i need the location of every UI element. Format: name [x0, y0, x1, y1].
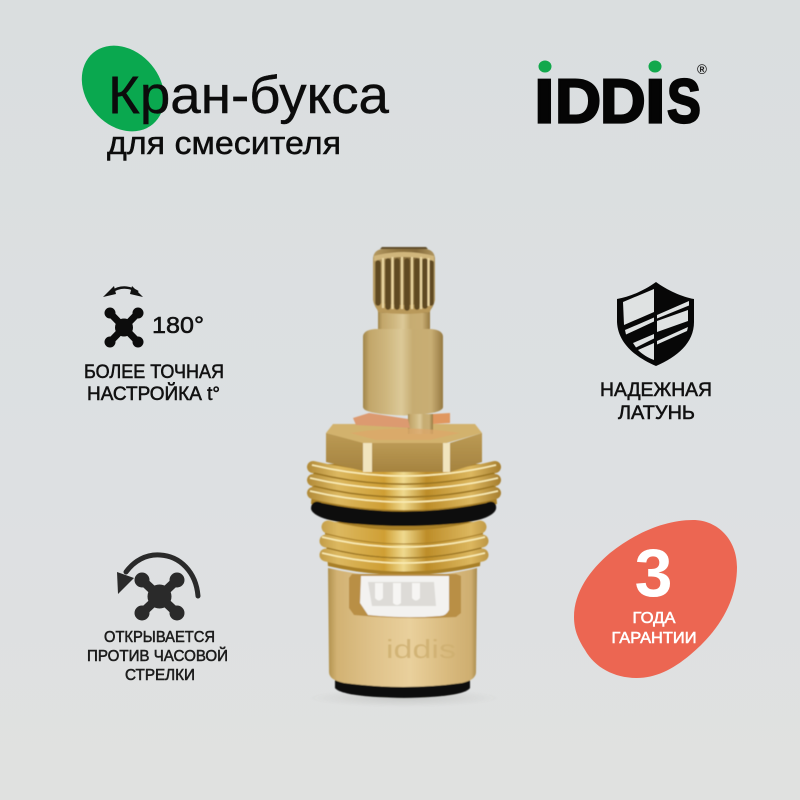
- title: [107, 66, 390, 161]
- upper cylinder: [363, 329, 443, 416]
- feature: reliable brass: [600, 282, 712, 424]
- copper washer: [350, 413, 460, 440]
- text: opens counter-clockwise: ОТКРЫВАЕТСЯ: [104, 629, 215, 646]
- threaded flange: [310, 464, 498, 513]
- badge: 3 year warranty: ГОДА: [632, 610, 676, 627]
- text: reliable brass: [600, 380, 712, 424]
- icon: shield: [617, 282, 694, 366]
- text: more precise temperature setting: БОЛЕЕ ТОЧНАЯ: [84, 362, 224, 383]
- text: more precise temperature setting: НАСТРОЙКА t°: [87, 383, 220, 405]
- label: 180 degrees: 180°: [152, 312, 204, 338]
- product: brass faucet cartridge: [309, 247, 499, 707]
- icon: handle with 180 degree arc: [103, 286, 144, 348]
- text: opens counter-clockwise: ПРОТИВ ЧАСОВОЙ: [87, 646, 228, 665]
- title: для смесителя: [107, 125, 341, 161]
- logo: IDDIS: D: [600, 67, 646, 136]
- text: opens counter-clockwise: [87, 629, 228, 684]
- title: Кран-букса: [108, 66, 390, 125]
- black bottom seal: [335, 678, 470, 698]
- spline head: [373, 247, 435, 334]
- lower thread: [322, 522, 485, 575]
- feature: 180 degree adjustment: [84, 286, 224, 405]
- logo: IDDIS: I: [645, 66, 666, 136]
- logo: IDDIS: S: [667, 68, 701, 137]
- text: reliable brass: ЛАТУНЬ: [618, 403, 695, 424]
- logo: IDDIS: [534, 60, 707, 137]
- feature: opens counter-clockwise: [87, 555, 228, 684]
- window with white insert: [349, 574, 461, 618]
- brass body: [328, 568, 477, 687]
- logo: IDDIS: D: [555, 67, 601, 136]
- badge: 3 year warranty: 3: [635, 535, 672, 611]
- decorative green blob: [65, 29, 181, 148]
- badge: 3 year warranty: ГАРАНТИИ: [612, 630, 696, 647]
- logo: IDDIS: I: [534, 66, 555, 136]
- text: opens counter-clockwise: СТРЕЛКИ: [125, 667, 195, 684]
- black o-ring: [311, 502, 496, 526]
- icon: handle with counter-clockwise arrow: [117, 555, 198, 620]
- logo: IDDIS: ®: [697, 62, 707, 77]
- text: more precise temperature setting: [84, 362, 224, 405]
- text: reliable brass: НАДЕЖНАЯ: [600, 380, 712, 401]
- embossed brand mark: iddis: [386, 634, 456, 664]
- hexagon nut: [326, 424, 482, 472]
- badge: 3 year warranty: [574, 520, 737, 678]
